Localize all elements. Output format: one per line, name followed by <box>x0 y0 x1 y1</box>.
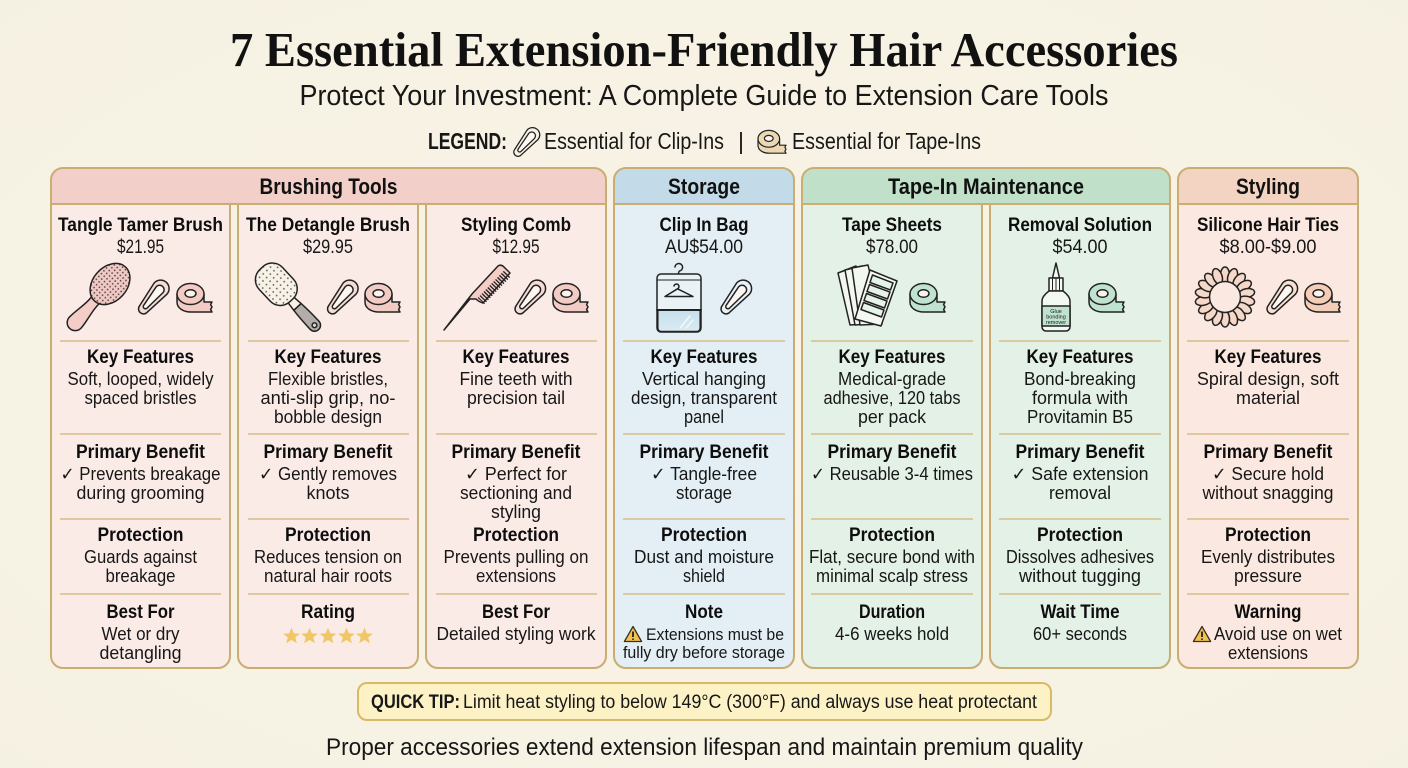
icon: clip <box>134 277 173 318</box>
card: Styling Comb: Key Features <box>462 347 570 368</box>
card: Tangle Tamer Brush <box>51 204 230 668</box>
card: Silicone Hair Ties: Silicone Hair Ties <box>1197 215 1339 236</box>
card: Clip In Bag: Primary Benefit <box>640 442 769 463</box>
card: The Detangle Brush <box>238 204 418 668</box>
quick tip callout <box>358 683 1051 720</box>
card: Styling Comb: Fine teeth with <box>460 369 572 389</box>
panel: Tape-In Maintenance <box>802 168 1170 668</box>
card: Removal Solution: Key Features <box>1026 347 1134 368</box>
legend: | <box>738 128 744 154</box>
card: Styling Comb: Protection <box>473 525 559 546</box>
column header: Styling: Styling <box>1236 174 1300 199</box>
card: Tangle Tamer Brush: Primary Benefit <box>76 442 206 463</box>
card: Clip In Bag: shield <box>683 566 725 586</box>
column header: Storage <box>614 168 794 204</box>
card: Silicone Hair Ties: Avoid use on wet <box>1214 624 1342 644</box>
card: Clip In Bag: fully dry before storage <box>623 643 785 662</box>
card: Tape Sheets: Flat, secure bond with <box>809 547 975 567</box>
column header: Tape-In Maintenance: Tape-In Maintenance <box>888 174 1084 199</box>
card: The Detangle Brush: Reduces tension on <box>254 547 402 567</box>
card: Tangle Tamer Brush: ✓ Prevents breakage <box>60 464 220 484</box>
quick tip callout: QUICK TIP: <box>371 692 460 713</box>
card: The Detangle Brush: Key Features <box>274 347 382 368</box>
card: Tangle Tamer Brush: Guards against <box>84 547 197 567</box>
icon: tape <box>1305 284 1340 312</box>
footer statement: Proper accessories extend extension lifespan and maintain premium quality <box>326 734 1083 761</box>
card: Tangle Tamer Brush: $21.95 <box>117 237 164 258</box>
column header: Storage: Storage <box>668 174 740 199</box>
panel: Storage <box>614 168 794 668</box>
icon: tangle tamer brush <box>57 256 138 340</box>
card: The Detangle Brush: bobble design <box>274 407 382 427</box>
card: Styling Comb: styling <box>491 502 541 522</box>
icon: tape <box>553 284 588 312</box>
bottle label: Glue <box>1050 309 1062 315</box>
icon: clip <box>716 277 755 318</box>
card: Removal Solution: Bond-breaking <box>1024 369 1136 389</box>
icon: clip <box>510 277 549 318</box>
card: Removal Solution: Protection <box>1037 525 1123 546</box>
card: Clip In Bag: storage <box>676 483 732 503</box>
card: Silicone Hair Ties <box>1178 204 1358 668</box>
card: Tape Sheets: adhesive, 120 tabs <box>824 388 960 408</box>
card: Clip In Bag: Key Features <box>650 347 758 368</box>
icon: tape sheets <box>838 265 897 326</box>
card: The Detangle Brush: Protection <box>285 525 371 546</box>
card: The Detangle Brush: Rating <box>301 602 355 623</box>
card: Silicone Hair Ties: Key Features <box>1214 347 1322 368</box>
card: Tangle Tamer Brush: spaced bristles <box>84 388 196 408</box>
card: Tangle Tamer Brush: Protection <box>98 525 184 546</box>
card: The Detangle Brush: anti-slip grip, no- <box>260 388 396 408</box>
card: Silicone Hair Ties: $8.00-$9.00 <box>1220 237 1316 258</box>
card: Tape Sheets: ✓ Reusable 3-4 times <box>811 464 973 484</box>
card: Silicone Hair Ties: material <box>1236 388 1300 408</box>
icon: warning <box>624 626 642 642</box>
card: Tangle Tamer Brush: Key Features <box>87 347 194 368</box>
icon: tape <box>365 284 400 312</box>
icon: clip <box>1262 277 1301 318</box>
icon: detangle brush <box>250 257 330 341</box>
card: Clip In Bag: design, transparent <box>631 388 777 408</box>
column header: Styling <box>1178 168 1358 204</box>
card: Removal Solution: $54.00 <box>1052 237 1108 258</box>
card: Styling Comb: $12.95 <box>492 237 540 258</box>
card: Styling Comb: ✓ Perfect for <box>465 464 567 484</box>
column header: Brushing Tools <box>51 168 606 204</box>
card: Tape Sheets: per pack <box>858 407 927 427</box>
column header: Tape-In Maintenance <box>802 168 1170 204</box>
card: Silicone Hair Ties: without snagging <box>1202 483 1334 503</box>
icon: legend clip <box>510 125 543 160</box>
card: Styling Comb: Prevents pulling on <box>444 547 588 567</box>
legend: LEGEND: <box>428 128 507 154</box>
icon: warning <box>1193 626 1211 642</box>
column header: Brushing Tools: Brushing Tools <box>260 174 398 199</box>
icon: spiral hair tie <box>1195 267 1255 327</box>
card: The Detangle Brush: Flexible bristles, <box>268 369 388 389</box>
quick tip callout: Limit heat styling to below 149°C (300°F) and always use heat protectant <box>463 692 1038 713</box>
icon: styling comb <box>444 265 510 330</box>
card: Clip In Bag: Extensions must be <box>646 625 784 644</box>
card: Silicone Hair Ties: Evenly distributes <box>1201 547 1335 567</box>
card: Clip In Bag: Protection <box>661 525 747 546</box>
card: Removal Solution: Wait Time <box>1040 602 1120 623</box>
card: Silicone Hair Ties: ✓ Secure hold <box>1212 464 1324 484</box>
icon: storage bag <box>657 263 701 332</box>
card: Removal Solution: Removal Solution <box>1008 215 1152 236</box>
card: Removal Solution: 60+ seconds <box>1033 624 1127 644</box>
card: Tape Sheets: Tape Sheets <box>842 215 942 236</box>
icon: tape <box>910 284 945 312</box>
card: The Detangle Brush: natural hair roots <box>264 566 392 586</box>
card: The Detangle Brush: knots <box>306 483 350 503</box>
card: The Detangle Brush: ✓ Gently removes <box>259 464 397 484</box>
card: Tangle Tamer Brush: Best For <box>106 602 175 623</box>
legend: Essential for Clip-Ins <box>544 128 724 154</box>
card: Clip In Bag: Clip In Bag <box>660 215 748 236</box>
icon: removal solution bottle <box>1042 263 1070 331</box>
panel: Styling <box>1178 168 1358 668</box>
card: Clip In Bag: Note <box>685 602 723 623</box>
card: Silicone Hair Ties: extensions <box>1228 643 1308 663</box>
card: Clip In Bag <box>614 204 794 668</box>
card: Silicone Hair Ties: Spiral design, soft <box>1197 369 1339 389</box>
card: Removal Solution: Dissolves adhesives <box>1006 547 1154 567</box>
card: Styling Comb: Styling Comb <box>461 215 571 236</box>
card: Silicone Hair Ties: Protection <box>1225 525 1311 546</box>
bottle label: bonding <box>1046 314 1066 320</box>
icon: tape <box>1089 284 1124 312</box>
card: Tangle Tamer Brush: breakage <box>106 566 176 586</box>
card: Removal Solution: without tugging <box>1018 566 1141 586</box>
legend <box>428 125 981 160</box>
card: Removal Solution: ✓ Safe extension <box>1012 464 1148 484</box>
card: The Detangle Brush: Primary Benefit <box>264 442 393 463</box>
legend: Essential for Tape-Ins <box>792 128 981 154</box>
card: Tangle Tamer Brush: detangling <box>100 643 182 663</box>
card: Tape Sheets: minimal scalp stress <box>816 566 968 586</box>
card: Removal Solution: Provitamin B5 <box>1027 407 1133 427</box>
bottle label: remover <box>1046 320 1066 326</box>
card: Tape Sheets: 4-6 weeks hold <box>835 624 949 644</box>
card: Styling Comb: sectioning and <box>460 483 572 503</box>
icon: clip <box>323 277 362 318</box>
card: The Detangle Brush: $29.95 <box>303 237 353 258</box>
card: Styling Comb: Best For <box>482 602 551 623</box>
card: Tape Sheets <box>802 204 982 668</box>
card: Tape Sheets: Key Features <box>838 347 946 368</box>
card: Clip In Bag: panel <box>684 407 724 427</box>
card: Tangle Tamer Brush: during grooming <box>76 483 204 503</box>
card: Removal Solution: Primary Benefit <box>1016 442 1145 463</box>
card: Removal Solution: removal <box>1049 483 1111 503</box>
card: Tape Sheets: Primary Benefit <box>828 442 957 463</box>
card: Clip In Bag: AU$54.00 <box>665 237 743 258</box>
title: 7 Essential Extension-Friendly Hair Accessories <box>230 22 1178 77</box>
subtitle: Protect Your Investment: A Complete Guide to Extension Care Tools <box>300 80 1108 112</box>
card: Tangle Tamer Brush: Wet or dry <box>102 624 180 644</box>
card: Styling Comb: Primary Benefit <box>452 442 581 463</box>
card: Styling Comb <box>426 204 606 668</box>
card: Styling Comb: precision tail <box>467 388 565 408</box>
card: The Detangle Brush: The Detangle Brush <box>246 215 410 236</box>
card: Tape Sheets: Protection <box>849 525 935 546</box>
panel: Brushing Tools <box>51 168 606 668</box>
card: Tape Sheets: Duration <box>859 602 925 623</box>
card: Silicone Hair Ties: Primary Benefit <box>1204 442 1333 463</box>
card: Tape Sheets: Medical-grade <box>838 369 946 389</box>
card: Tape Sheets: $78.00 <box>866 237 918 258</box>
rating stars <box>283 628 373 643</box>
icon: tape <box>177 284 212 312</box>
icon: legend tape <box>758 130 786 153</box>
card: Silicone Hair Ties: pressure <box>1234 566 1302 586</box>
card: Styling Comb: extensions <box>476 566 556 586</box>
card: Clip In Bag: Vertical hanging <box>642 369 766 389</box>
card: Silicone Hair Ties: Warning <box>1234 602 1302 623</box>
card: Styling Comb: Detailed styling work <box>436 624 596 644</box>
card: Tangle Tamer Brush: Soft, looped, widely <box>68 369 214 389</box>
card: Clip In Bag: Dust and moisture <box>634 547 774 567</box>
card: Tangle Tamer Brush: Tangle Tamer Brush <box>58 215 223 236</box>
bottle label <box>1046 309 1066 326</box>
card: Removal Solution <box>990 204 1170 668</box>
card: Removal Solution: formula with <box>1032 388 1128 408</box>
card: Clip In Bag: ✓ Tangle-free <box>651 464 757 484</box>
